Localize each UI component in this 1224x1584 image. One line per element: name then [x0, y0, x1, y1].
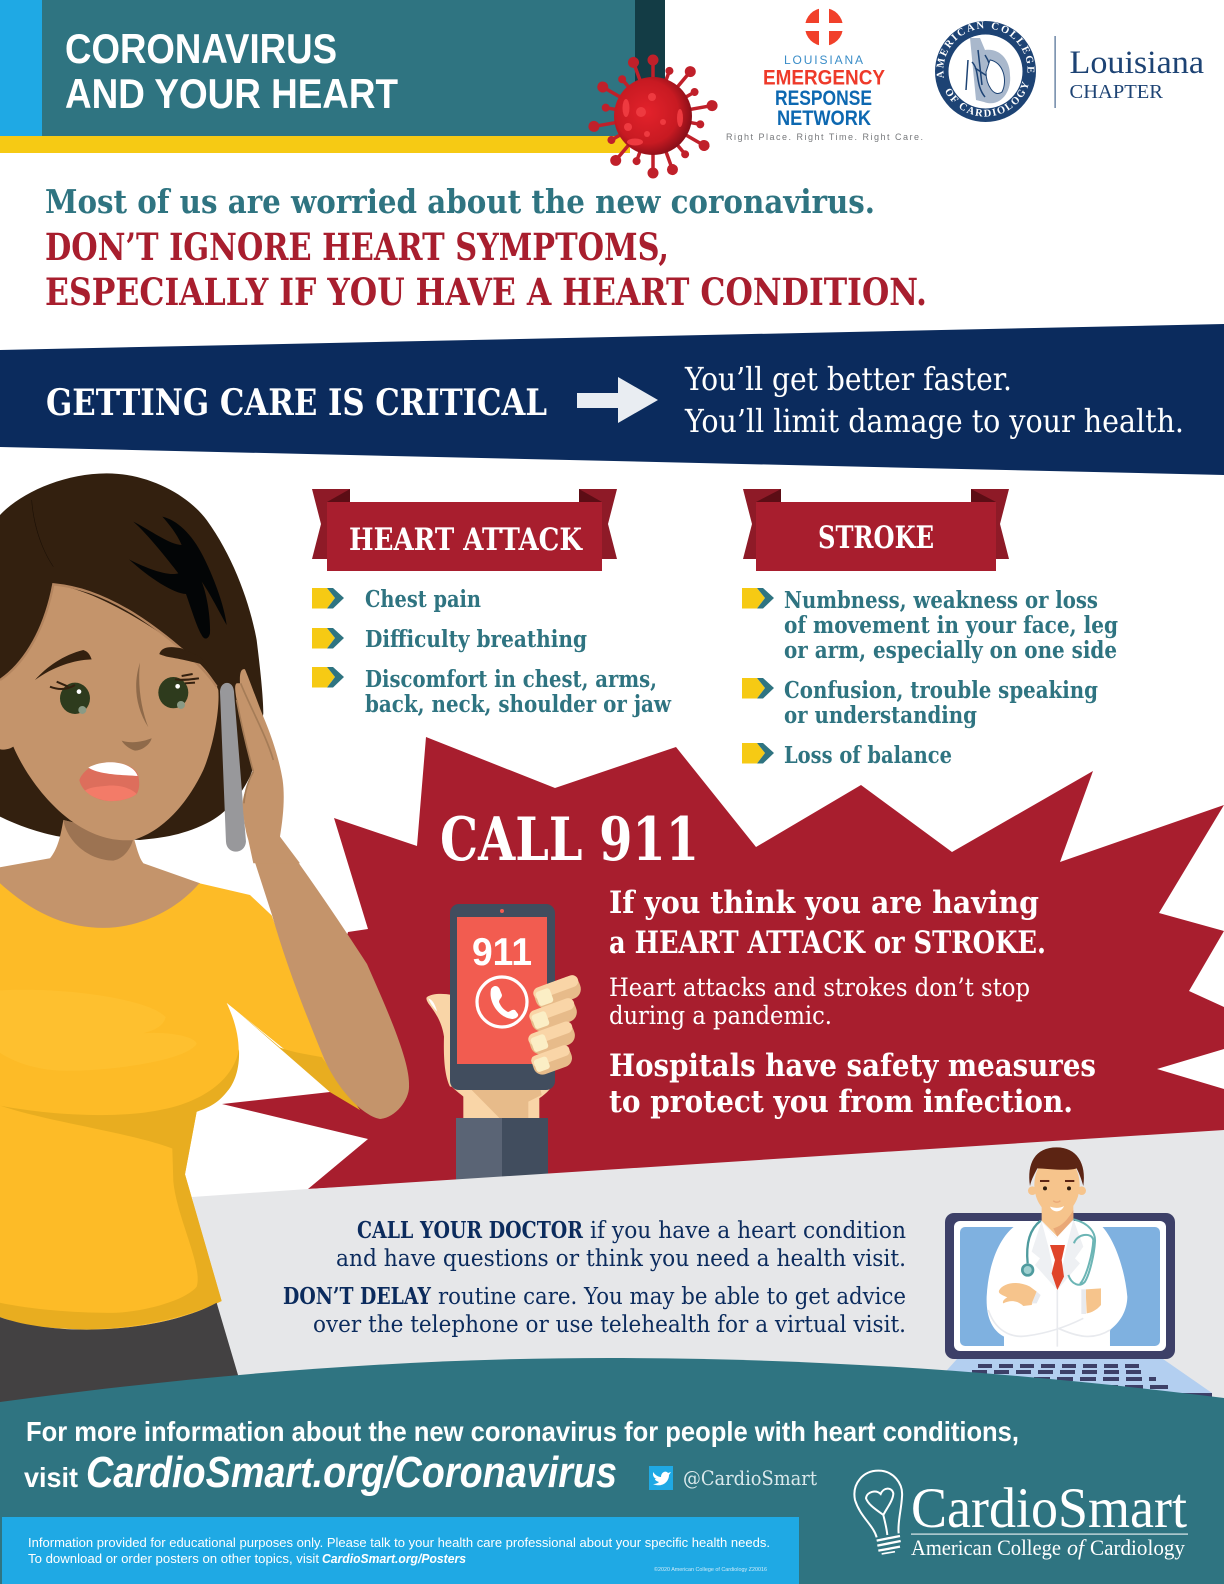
neck [1042, 1197, 1073, 1237]
fingers [527, 973, 584, 1077]
hair strand [32, 500, 53, 567]
coat [987, 1221, 1127, 1347]
title: CORONAVIRUS [65, 25, 337, 72]
bullet [312, 628, 344, 648]
logo: American College of Cardiology Louisiana Chapter: Louisiana [1070, 45, 1204, 81]
logo: CardioSmart [854, 1471, 1188, 1560]
title: AND YOUR HEART [65, 70, 398, 117]
seal: OF CARDIOLOGY [946, 81, 1028, 117]
stethoscope [1027, 1221, 1041, 1263]
icon: red cross circle [803, 6, 845, 48]
text block: Heart attacks and strokes don’t stop [609, 973, 1030, 1002]
panel: call your doctor: over the telephone or use telehealth for a virtual visit. [313, 1310, 906, 1338]
head [1028, 1186, 1037, 1195]
illustration: worried woman on phone [0, 473, 409, 1406]
logo: Louisiana Emergency Response Network: LOUISIANA [784, 53, 863, 67]
phone [220, 683, 246, 852]
text block: during a pandemic. [609, 1001, 832, 1030]
sleeve [456, 1118, 548, 1184]
hair highlights [129, 517, 227, 639]
panel: heart attack symptoms: back, neck, shoulder or jaw [365, 690, 672, 718]
disclaimer box: ©2020 American College of Cardiology Z20016 [654, 1566, 767, 1573]
shirt shadow [0, 1003, 360, 1329]
icon: lightbulb with heart [854, 1471, 902, 1554]
logo: CardioSmart: of [1067, 1535, 1087, 1560]
ribbon heading: HEART ATTACK [349, 522, 583, 558]
seal: AMERICAN COLLEGE [936, 22, 1034, 78]
shirt [0, 883, 360, 1406]
hair [0, 473, 263, 840]
bullet [312, 588, 344, 608]
ribbon heading [743, 489, 1009, 571]
band: getting care is critical: GETTING CARE IS CRITICAL [46, 382, 547, 424]
panel: footer: CardioSmart.org/Coronavirus [86, 1448, 617, 1497]
text block: If you think you are having [609, 885, 1039, 921]
logo: Louisiana Emergency Response Network: EMERGENCY [763, 66, 885, 90]
panel: call 911 starburst [222, 737, 1224, 1189]
arm and hand [235, 669, 409, 1119]
icon: coronavirus [588, 54, 718, 178]
doctor [987, 1147, 1127, 1347]
face [0, 500, 246, 852]
logo: Louisiana Emergency Response Network: NETWORK [777, 107, 871, 130]
panel: call your doctor: DON’T DELAY [283, 1282, 431, 1310]
laptop [920, 1213, 1212, 1400]
text block: to protect you from infection. [609, 1084, 1073, 1120]
logo: Louisiana Emergency Response Network [726, 6, 923, 142]
icon: handset [477, 977, 527, 1027]
tie [1050, 1245, 1065, 1290]
illustration: doctor on laptop [920, 1147, 1212, 1400]
icon: hand holding phone: 911 [472, 931, 532, 974]
pants [0, 1303, 238, 1406]
text block [609, 885, 1096, 1120]
logo: Louisiana Emergency Response Network: Right Place. Right Time. Right Care. [726, 132, 923, 142]
logo: Louisiana Emergency Response Network: RESPONSE [775, 87, 872, 110]
panel: stroke symptoms: of movement in your face, leg [784, 611, 1118, 639]
logo: CardioSmart: American College [911, 1535, 1061, 1560]
logo: CardioSmart: CardioSmart [911, 1477, 1187, 1540]
panel: stroke symptoms: or understanding [784, 701, 977, 729]
logo: CardioSmart: Cardiology [1090, 1535, 1185, 1560]
panel: stroke symptoms [742, 489, 1118, 769]
panel: footer: For more information about the new coronavirus for people with heart conditions, [26, 1416, 1019, 1447]
eyebrows [35, 647, 210, 680]
logo: American College of Cardiology Louisiana Chapter: CHAPTER [1070, 81, 1164, 103]
panel: stroke symptoms: Confusion, trouble speaking [784, 676, 1098, 704]
mouth [79, 762, 139, 801]
arrow [577, 377, 658, 423]
panel: call your doctor: routine care. You may be able to get advice [438, 1282, 906, 1310]
panel: stroke symptoms: Loss of balance [784, 741, 952, 769]
shirt highlight [0, 990, 197, 1071]
icon: hand holding phone [426, 904, 584, 1184]
intro text [45, 182, 927, 314]
intro text: ESPECIALLY IF YOU HAVE A HEART CONDITION. [45, 270, 927, 314]
panel: heart attack symptoms: Difficulty breathing [365, 625, 587, 653]
panel: heart attack symptoms [312, 489, 672, 718]
disclaimer box: To download or order posters on other topics, visit [28, 1552, 320, 1566]
bullet [742, 743, 774, 764]
panel: heart attack symptoms: Chest pain [365, 585, 481, 613]
intro text: DON’T IGNORE HEART SYMPTOMS, [45, 225, 669, 269]
ribbon heading [312, 489, 617, 571]
panel: call your doctor: if you have a heart condition [590, 1216, 906, 1244]
band: getting care is critical: You’ll get better faster. [684, 360, 1012, 398]
nose [122, 663, 152, 751]
panel: heart attack symptoms: Discomfort in chest, arms, [365, 665, 657, 693]
disclaimer box: Information provided for educational purposes only. Please talk to your health care professional about your specific health needs. [28, 1536, 770, 1550]
logo: American College of Cardiology Louisiana Chapter [935, 21, 1204, 122]
panel: call your doctor: CALL YOUR DOCTOR [357, 1216, 583, 1244]
bullet [742, 678, 774, 698]
seal [935, 21, 1036, 122]
panel: footer: visit [24, 1462, 78, 1493]
intro text: Most of us are worried about the new coronavirus. [45, 182, 875, 221]
panel: footer [0, 1358, 1224, 1584]
bullet [312, 667, 344, 688]
header banner [0, 0, 665, 153]
title [65, 25, 398, 117]
band: getting care is critical [0, 324, 1224, 475]
text block: Hospitals have safety measures [609, 1048, 1096, 1084]
disclaimer box [2, 1517, 799, 1584]
panel: stroke symptoms: or arm, especially on one side [784, 636, 1117, 664]
ribbon heading: STROKE [818, 520, 934, 556]
chest and neck [0, 820, 200, 937]
panel: call your doctor [192, 1130, 1224, 1420]
panel: call your doctor: and have questions or think you need a health visit. [336, 1244, 906, 1272]
panel: footer: @CardioSmart [683, 1466, 817, 1490]
arms and hands [999, 1283, 1037, 1306]
panel: stroke symptoms: Numbness, weakness or loss [784, 586, 1098, 614]
disclaimer box: CardioSmart.org/Posters [322, 1552, 466, 1566]
eyes [60, 683, 90, 714]
bullet [742, 588, 774, 608]
icon: twitter [649, 1466, 673, 1490]
text block: a HEART ATTACK or STROKE. [609, 925, 1046, 961]
panel: call 911 starburst: CALL 911 [440, 805, 699, 875]
